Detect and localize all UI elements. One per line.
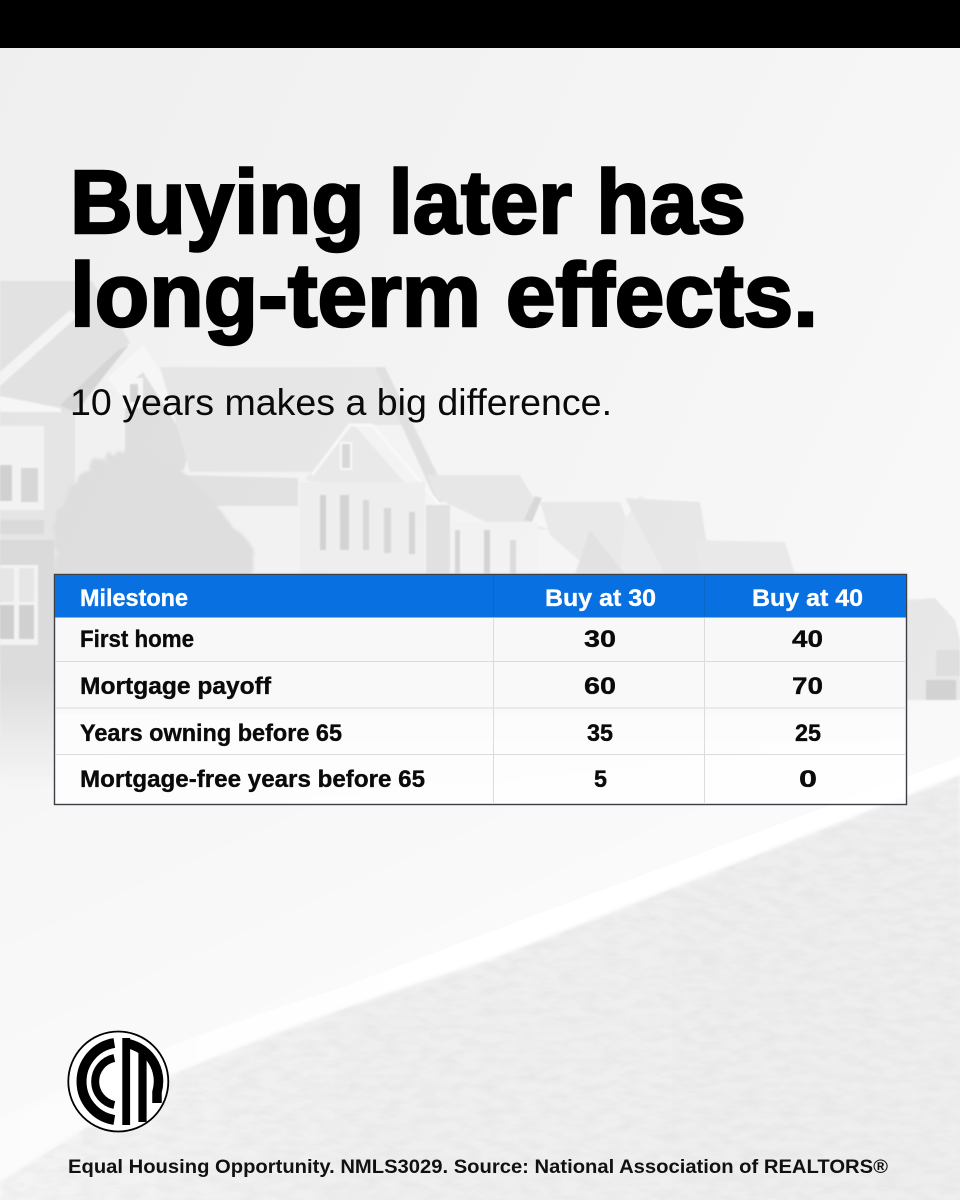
logo: CCM roundel [68, 1032, 168, 1132]
left strip beside table: window and hedge [0, 540, 54, 790]
row: mortgage-free years: Mortgage-free years before 65 [80, 766, 425, 793]
title: long-term effects. [70, 246, 818, 346]
row: mortgage payoff: Mortgage payoff [80, 673, 272, 700]
footer source line: Equal Housing Opportunity. NMLS3029. Source: National Association of REALTORS® [68, 1156, 889, 1178]
row: years owning: 35 [587, 720, 613, 747]
title: Buying later has [70, 153, 746, 253]
row: first home: 40 [792, 626, 823, 653]
table header: Buy at 40 [752, 585, 863, 612]
table body [54, 574, 906, 804]
row: first home: First home [80, 626, 194, 653]
ghost street scene behind table [54, 574, 906, 740]
row: first home: 30 [584, 626, 616, 653]
receding houses [427, 475, 795, 574]
table header: Buy at 30 [545, 585, 656, 612]
second house [160, 367, 450, 574]
row: years owning: Years owning before 65 [80, 720, 342, 747]
houses far left [0, 281, 205, 642]
row: mortgage payoff [80, 673, 823, 700]
row: mortgage payoff: 70 [792, 673, 823, 700]
table header: Milestone [80, 585, 188, 612]
title [70, 153, 818, 346]
row: mortgage-free years: 0 [799, 766, 817, 793]
far right houses [906, 598, 960, 700]
road, curb and lawn [0, 757, 960, 1200]
row: mortgage-free years: 5 [594, 766, 607, 793]
tree [38, 450, 254, 640]
table [54, 574, 906, 804]
table header [55, 575, 906, 618]
top black bar [0, 0, 960, 48]
row: years owning: 25 [795, 720, 821, 747]
row: mortgage-free years [80, 766, 817, 793]
subtitle: 10 years makes a big difference. [70, 382, 612, 423]
row: years owning [80, 720, 821, 747]
row: mortgage payoff: 60 [584, 673, 616, 700]
row: first home [80, 626, 823, 653]
road surface [0, 770, 960, 1200]
